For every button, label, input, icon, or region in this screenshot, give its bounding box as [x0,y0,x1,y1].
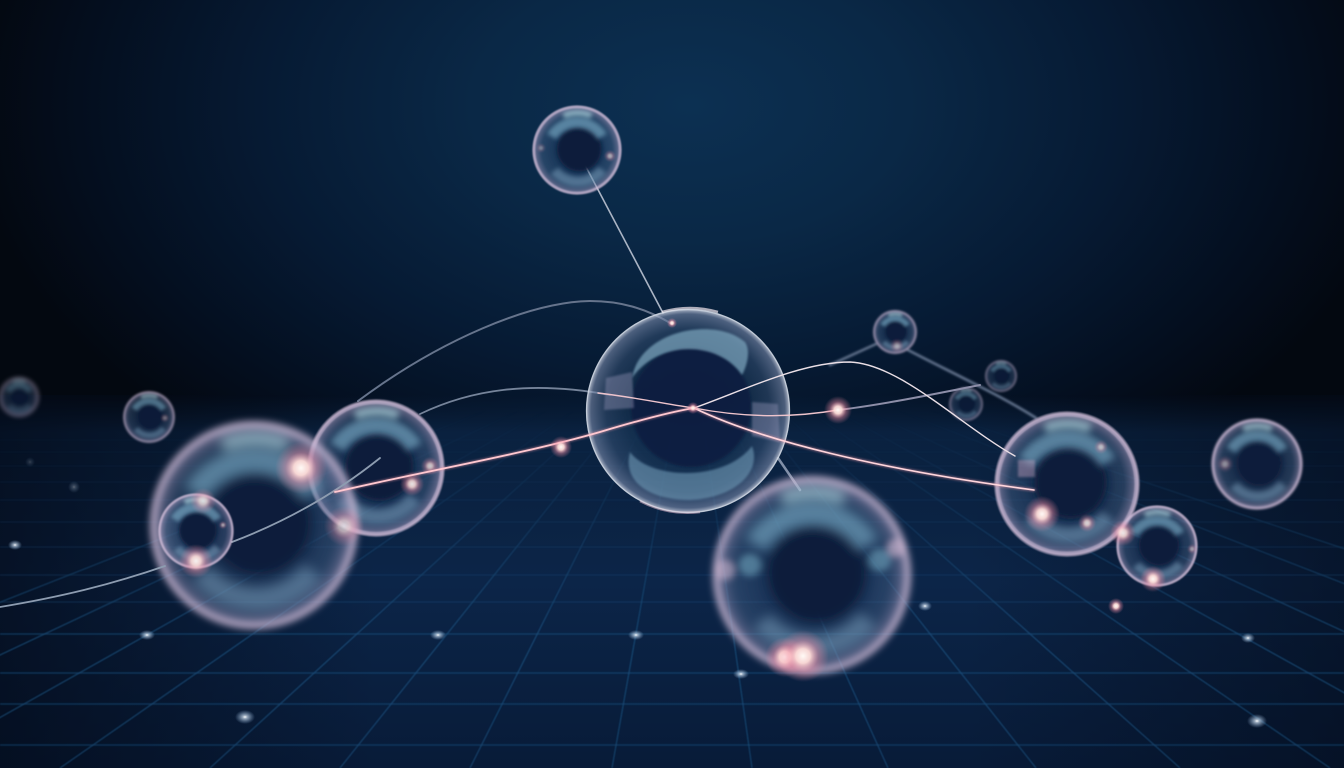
floor sparkle nodes [8,457,1267,728]
glowing junction nodes [550,318,852,458]
bubble: far left small [0,377,39,417]
floor plane [0,395,1344,768]
bubble: mid-left [307,399,445,537]
bubble: right small foreground [1110,505,1198,592]
bubble: right large [994,411,1140,557]
bubble: left small [123,391,175,443]
thread: grey line crossing the large left bubble [0,458,380,607]
threads: glowing pink lines across the central sphere [335,362,1034,492]
bubble: large front center [712,475,912,682]
bubble: far right [1211,418,1303,510]
bubble: right upper small node [873,310,917,354]
bubble: top satellite [532,105,622,195]
threads: connecting lines behind bubbles [358,165,1036,490]
bubble: large front left [149,420,364,630]
bubble: background pair right [949,360,1017,421]
bubble: small over large left [158,488,234,578]
perspective grid floor [0,465,1344,768]
bubble: central large sphere [586,308,790,513]
